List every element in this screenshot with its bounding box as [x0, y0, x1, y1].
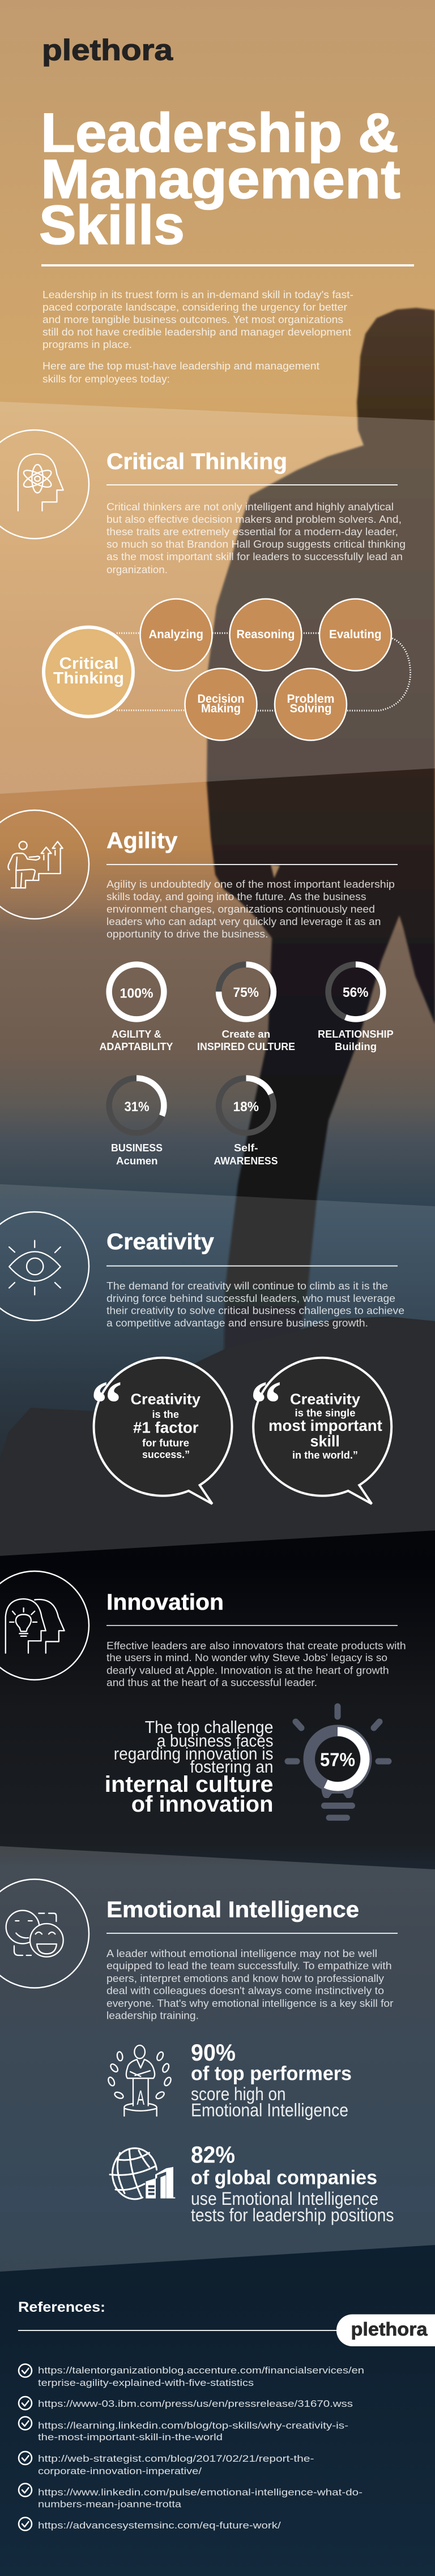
- heading: Emotional Intelligence: [106, 1898, 359, 1923]
- donut chart: 18%: AWARENESS: [214, 1155, 278, 1167]
- donut chart: 75%: INSPIRED CULTURE: [197, 1041, 295, 1052]
- statistic: 82%: [110, 2141, 394, 2225]
- icon: leader with laurels on pedestal: A: [137, 2086, 144, 2109]
- title: [39, 102, 400, 256]
- intro text: [42, 289, 353, 385]
- donut chart: 56%: [318, 965, 394, 1052]
- donut chart: 75%: Create an: [222, 1029, 270, 1040]
- body text: Effective leaders are also innovators that create products with: [106, 1640, 406, 1652]
- panel: references: [18, 2299, 435, 2531]
- statistic text: The top challenge: [145, 1717, 273, 1737]
- body text: equipped to lead the team successfully. To empathize with: [106, 1960, 392, 1971]
- body text: peers, interpret emotions and know how to professionally: [106, 1973, 384, 1984]
- callout: quote 2: in the world.”: [292, 1450, 358, 1461]
- diagram: thinking process circles: [44, 599, 411, 740]
- heading: Innovation: [106, 1590, 224, 1615]
- body text: [106, 1280, 404, 1328]
- panel: critical thinking: [0, 430, 411, 740]
- donut chart: 31%: 31%: [125, 1099, 150, 1115]
- donut chart: 31%: [109, 1078, 164, 1167]
- reference list: https://talentorganizationblog.accenture.com/financialservices/en: [38, 2365, 364, 2376]
- donut chart: 18%: Self-: [234, 1142, 258, 1154]
- intro text: still do not have credible leadership and manager development: [42, 326, 351, 338]
- reference list: the-most-important-skill-in-the-world: [38, 2432, 223, 2442]
- donut chart: 18%: 18%: [233, 1099, 259, 1115]
- statistic text: a business faces: [157, 1731, 273, 1751]
- statistic text: fostering an: [190, 1757, 273, 1777]
- body text: a competitive advantage and ensure business growth.: [106, 1317, 368, 1328]
- icon: two heads with light bulb: [0, 1571, 89, 1680]
- statistic text: [105, 1717, 273, 1817]
- statistic: 90%: Emotional Intelligence: [191, 2100, 348, 2121]
- icon: smiling faces: [0, 1880, 89, 1988]
- body text: the users in mind. No wonder why Steve Jobs' legacy is so: [106, 1652, 387, 1663]
- icon: globe and buildings: [110, 2148, 175, 2199]
- callout: quote 2: “: [250, 1369, 282, 1439]
- body text: [106, 1948, 394, 2021]
- icon: person climbing stairs: [0, 810, 89, 919]
- reference list: [19, 2364, 364, 2531]
- body text: leaders who can adapt very quickly and leverage it as an: [106, 916, 381, 927]
- diagram: thinking process circles: Decision: [197, 693, 245, 706]
- body text: so much so that Brandon Hall Group suggests critical thinking: [106, 539, 406, 550]
- reference list: https://www-03.ibm.com/press/us/en/pressrelease/31670.wss: [38, 2398, 353, 2409]
- donut chart: 100%: [100, 965, 173, 1052]
- callout: quote 1: is the: [152, 1409, 179, 1420]
- heading: Creativity: [106, 1229, 215, 1254]
- heading: Agility: [106, 828, 178, 853]
- body text: opportunity to drive the business.: [106, 928, 268, 940]
- icon: leader with laurels on pedestal: [107, 2045, 172, 2116]
- body text: but also effective decision makers and problem solvers. And,: [106, 514, 402, 525]
- statistic: 82%: tests for leadership positions: [191, 2205, 394, 2225]
- reference list: https://advancesystemsinc.com/eq-future-work/: [38, 2520, 281, 2531]
- icon: head with atom: [0, 430, 89, 539]
- callout: quote 2: Creativity: [290, 1391, 360, 1408]
- body text: as the most important skill for leaders to successfully lead an: [106, 551, 403, 562]
- body text: everyone. That's why emotional intelligence is a key skill for: [106, 1998, 394, 2009]
- heading: Critical Thinking: [106, 449, 287, 474]
- statistic: 90%: [107, 2039, 352, 2121]
- donut chart: 100%: 100%: [120, 986, 153, 1001]
- body text: their creativity to solve critical business challenges to achieve: [106, 1305, 404, 1316]
- statistic: 82%: use Emotional Intelligence: [191, 2188, 378, 2209]
- body text: Critical thinkers are not only intelligent and highly analytical: [106, 501, 394, 513]
- statistic: 82%: of global companies: [191, 2167, 377, 2188]
- diagram: thinking process circles: Analyzing: [148, 628, 203, 641]
- donut chart: 75%: [197, 965, 295, 1052]
- diagram: thinking process circles: Solving: [290, 702, 332, 715]
- statistic: 90%: of top performers: [191, 2063, 352, 2084]
- logo: plethora: plethora: [42, 34, 173, 67]
- donut chart: 56%: 56%: [343, 985, 368, 1000]
- heading: References:: [18, 2299, 105, 2315]
- statistic: 90%: 90%: [191, 2039, 236, 2066]
- donut chart: 31%: BUSINESS: [111, 1142, 163, 1154]
- callout: quote 2: most important: [268, 1417, 382, 1434]
- diagram: thinking process circles: Critical: [59, 655, 119, 673]
- donut chart: 31%: Acumen: [116, 1155, 157, 1167]
- body text: [106, 1640, 406, 1688]
- donut chart: 56%: Building: [335, 1041, 377, 1052]
- intro text: skills for employees today:: [42, 373, 170, 385]
- body text: deal with colleagues doesn't always come instinctively to: [106, 1985, 384, 1996]
- donut chart: 100%: ADAPTABILITY: [100, 1041, 173, 1052]
- reference list: https://www.linkedin.com/pulse/emotional-intelligence-what-do-: [38, 2487, 362, 2497]
- panel: emotional intelligence: [0, 1880, 398, 2225]
- body text: skills today, and going into the future. As the business: [106, 891, 366, 902]
- reference list: http://web-strategist.com/blog/2017/02/21/report-the-: [38, 2453, 314, 2464]
- reference list: corporate-innovation-imperative/: [38, 2466, 202, 2476]
- intro text: and more tangible business outcomes. Yet most organizations: [42, 314, 343, 325]
- title: Management: [41, 148, 400, 210]
- body text: [106, 879, 395, 940]
- callout: quote 2: [250, 1358, 391, 1504]
- body text: these traits are extremely essential for a modern-day leader,: [106, 526, 398, 537]
- callout: quote 1: [91, 1358, 232, 1504]
- logo badge: [336, 2314, 435, 2346]
- panel: innovation: [0, 1571, 406, 1821]
- reference list: terprise-agility-explained-with-five-statistics: [38, 2377, 254, 2388]
- body text: environment changes, organizations continuously need: [106, 904, 375, 915]
- callout: quote 2: skill: [310, 1433, 340, 1450]
- diagram: thinking process circles: Evaluting: [329, 628, 382, 641]
- statistic text: regarding innovation is: [114, 1744, 274, 1764]
- intro text: programs in place.: [42, 339, 132, 350]
- intro text: paced corporate landscape, considering the urgency for better: [42, 302, 347, 313]
- diagram: thinking process circles: Reasoning: [237, 628, 295, 641]
- panel: agility: [0, 810, 398, 1167]
- statistic: 90%: score high on: [191, 2084, 285, 2104]
- body text: dearly valued at Apple. Innovation is at the heart of growth: [106, 1665, 389, 1676]
- panel: creativity: [0, 1212, 404, 1504]
- statistic text: internal culture: [105, 1772, 273, 1797]
- callout: quote 1: #1 factor: [133, 1419, 199, 1436]
- body text: leadership training.: [106, 2010, 199, 2021]
- statistic text: of innovation: [131, 1792, 273, 1817]
- body text: A leader without emotional intelligence may not be well: [106, 1948, 377, 1959]
- donut chart: 75%: 75%: [233, 985, 259, 1000]
- reference list: https://learning.linkedin.com/blog/top-skills/why-creativity-is-: [38, 2420, 348, 2431]
- diagram: thinking process circles: Thinking: [53, 669, 124, 687]
- body text: The demand for creativity will continue to climb as it is the: [106, 1280, 388, 1292]
- callout: quote 1: success.”: [142, 1449, 190, 1460]
- statistic: 82%: 82%: [191, 2141, 235, 2168]
- title: Skills: [39, 194, 185, 256]
- chart: light bulb 57%: [288, 1706, 389, 1821]
- body text: driving force behind successful leaders, who must leverage: [106, 1293, 395, 1304]
- intro text: Leadership in its truest form is an in-demand skill in today's fast-: [42, 289, 353, 300]
- diagram: thinking process circles: Problem: [287, 693, 334, 706]
- logo badge: plethora: [351, 2319, 428, 2340]
- donut chart: 100%: AGILITY &: [112, 1029, 161, 1040]
- diagram: thinking process circles: Making: [201, 702, 241, 715]
- callout: quote 1: “: [91, 1369, 122, 1439]
- title: Leadership &: [41, 102, 399, 164]
- intro text: Here are the top must-have leadership and management: [42, 360, 319, 372]
- callout: quote 1: Creativity: [130, 1391, 201, 1408]
- icon: eye: [0, 1212, 89, 1321]
- body text: organization.: [106, 564, 168, 575]
- callout: quote 1: for future: [142, 1437, 189, 1448]
- body text: Agility is undoubtedly one of the most important leadership: [106, 879, 395, 890]
- reference list: numbers-mean-joanne-trotta: [38, 2498, 182, 2510]
- donut chart: 56%: RELATIONSHIP: [318, 1029, 394, 1040]
- body text: and thus at the heart of a successful leader.: [106, 1677, 317, 1688]
- callout: quote 2: is the single: [295, 1408, 356, 1419]
- chart: light bulb 57%: 57%: [320, 1749, 355, 1770]
- donut chart: 18%: [214, 1078, 278, 1167]
- body text: [106, 501, 406, 575]
